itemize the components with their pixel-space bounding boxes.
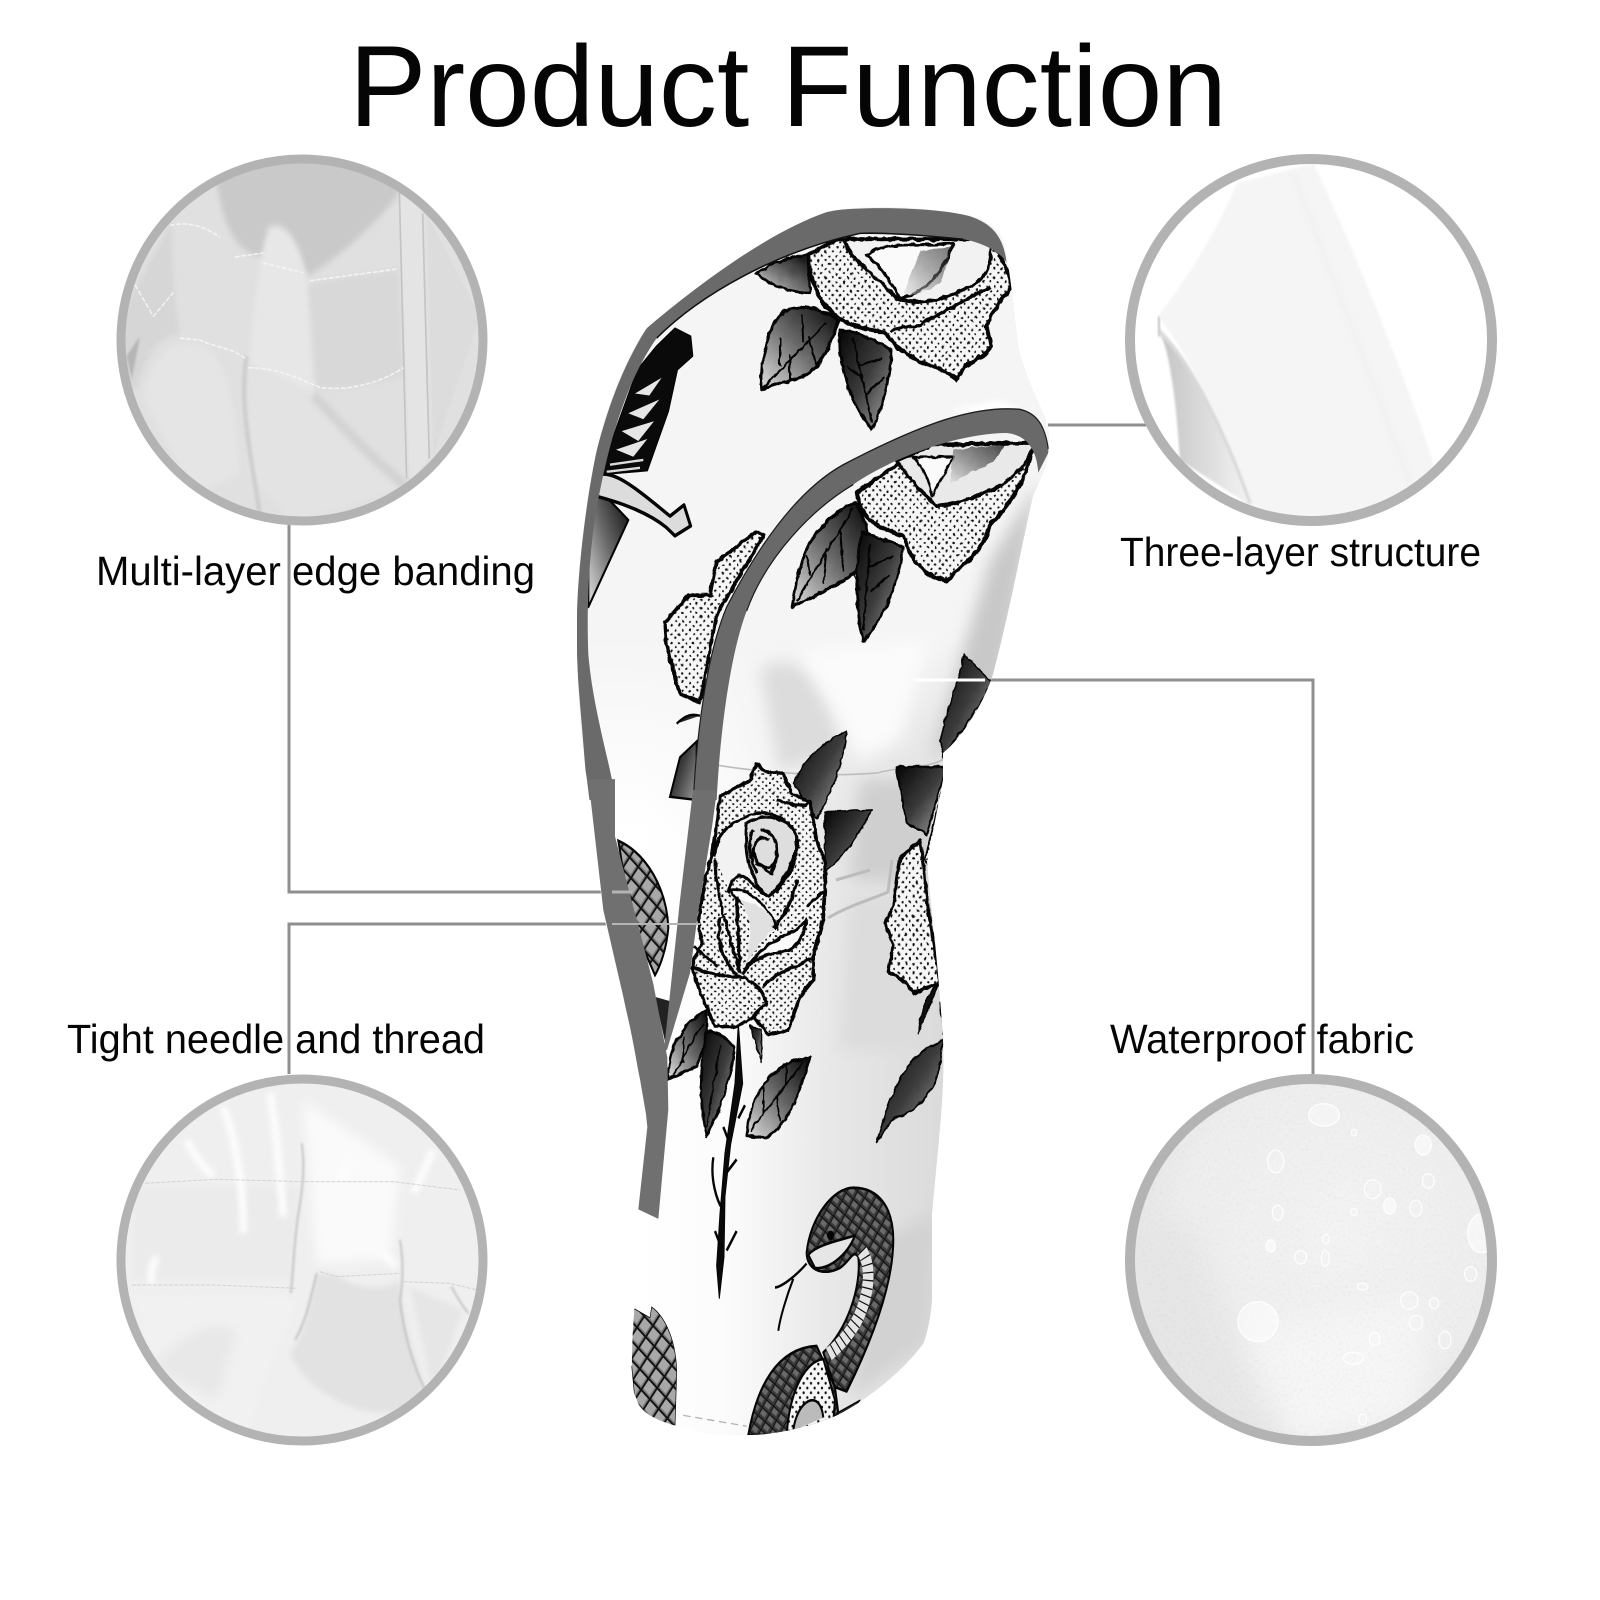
piping: back panel edge — [576, 208, 1007, 800]
artwork: upper panel, coordinates from upper crop — [588, 239, 1033, 800]
tattoo rose: behind front edge — [665, 532, 763, 702]
product: golf club head cover — [560, 190, 1060, 1450]
panel: three-layer structure detail — [1120, 150, 1510, 540]
label: waterproof fabric: Waterproof fabric — [1110, 1016, 1414, 1062]
tattoo dagger — [588, 328, 693, 607]
snake coil behind edge — [618, 841, 668, 975]
panel: waterproof fabric detail — [1120, 1070, 1510, 1460]
fabric surface — [588, 207, 1050, 1411]
piping: front panel lower taper — [664, 790, 717, 1050]
label: three-layer structure: Three-layer structure — [1120, 529, 1481, 575]
panel: tight needle and thread detail — [110, 1070, 500, 1460]
connector lines — [289, 425, 1313, 1074]
piping: front panel edge — [693, 409, 1048, 800]
title: Product Function — [349, 23, 1227, 151]
right edge rose — [877, 767, 947, 1142]
stem and lower leaves — [668, 1010, 810, 1138]
tattoo leaf: right edge — [940, 654, 992, 757]
stitched seam — [717, 759, 943, 775]
label: multi-layer edge banding: Multi-layer edge banding — [96, 548, 535, 594]
piping: lower left strip — [588, 779, 668, 1219]
panel: multi-layer edge banding detail — [110, 150, 500, 540]
tattoo rose: top — [757, 239, 1012, 429]
snake head and body — [632, 1188, 893, 1435]
infographic canvas — [68, 42, 1497, 1446]
faint line markers over product — [612, 680, 985, 924]
water droplets — [1238, 1104, 1496, 1425]
artwork: lower panel, coordinates from lower crop — [618, 767, 947, 1435]
label: tight needle and thread: Tight needle and thread — [67, 1016, 485, 1062]
tattoo rose: main centre — [692, 732, 872, 1035]
tattoo rose: front panel — [792, 443, 1033, 641]
